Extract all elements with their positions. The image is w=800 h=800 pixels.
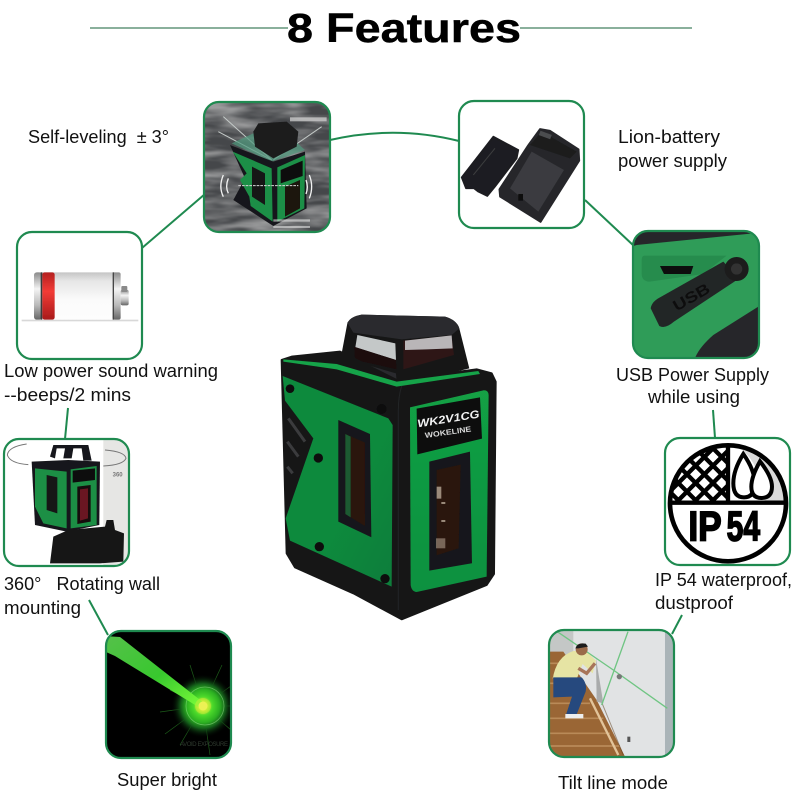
connector: self-leveling to lion battery xyxy=(330,133,459,141)
label: 360 rotating wall mounting: 360° Rotating wall xyxy=(4,573,160,594)
panel: USB: USB xyxy=(670,280,713,315)
product: left green face xyxy=(283,376,393,587)
product: laser level: WOKELINE xyxy=(424,425,472,440)
label: low power warning xyxy=(4,360,218,405)
panel: lion battery xyxy=(459,101,584,228)
product: top dome xyxy=(338,315,469,385)
label: USB power supply: USB Power Supply xyxy=(616,364,770,385)
panel: 360 rotating wall mounting: 360 xyxy=(113,473,123,479)
panel: USB xyxy=(632,230,760,360)
product: screws xyxy=(286,384,390,583)
connector: USB to IP54 xyxy=(713,410,715,438)
label: super bright: Super bright xyxy=(117,769,217,790)
product: label plate xyxy=(417,397,482,454)
panel: 360 rotating wall mounting xyxy=(4,439,129,566)
panel: super bright xyxy=(105,631,235,758)
product: right window xyxy=(429,452,472,571)
label: low power warning: Low power sound warning xyxy=(4,360,218,381)
label: IP54: dustproof xyxy=(655,592,734,613)
label: USB power supply xyxy=(616,364,770,407)
connector: low power to 360 rotating xyxy=(65,408,68,439)
label: lion battery: Lion-battery xyxy=(618,126,721,147)
connector: IP54 to tilt line xyxy=(672,615,682,634)
panel: IP54 waterproof icon: IP xyxy=(688,503,722,550)
label: low power warning: --beeps/2 mins xyxy=(4,384,131,405)
label: 360 rotating wall mounting xyxy=(4,573,160,618)
label: self-leveling: Self-leveling ± 3° xyxy=(28,126,169,147)
connector: 360 rotating to super bright xyxy=(89,600,108,635)
label: USB power supply: while using xyxy=(647,386,740,407)
product: left window xyxy=(338,420,371,537)
panel: IP54 waterproof icon xyxy=(664,436,792,566)
product: laser level: WK2V1CG xyxy=(417,409,481,430)
product: body xyxy=(282,352,496,619)
label: lion battery xyxy=(618,126,728,171)
label: lion battery: power supply xyxy=(618,150,728,171)
label: tilt line mode: Tilt line mode xyxy=(558,772,668,793)
panel: IP54 waterproof icon: 54 xyxy=(727,503,760,550)
label: IP54 xyxy=(655,569,792,613)
label: IP54: IP 54 waterproof, xyxy=(655,569,792,590)
product: rubber slats xyxy=(287,418,305,473)
connector: lion battery to USB xyxy=(585,200,634,246)
panel: tilt line mode xyxy=(547,630,675,757)
product: laser level xyxy=(282,315,496,619)
product: right green panel xyxy=(410,390,489,592)
connector: low power to self-leveling xyxy=(142,194,205,248)
label: 360 rotating wall mounting: mounting xyxy=(4,597,81,618)
panel: low power battery xyxy=(17,232,142,359)
title: 8 Features xyxy=(287,5,521,51)
panel: self-leveling xyxy=(204,102,330,232)
panel: super bright: AVOID EXPOSURE xyxy=(180,742,228,748)
